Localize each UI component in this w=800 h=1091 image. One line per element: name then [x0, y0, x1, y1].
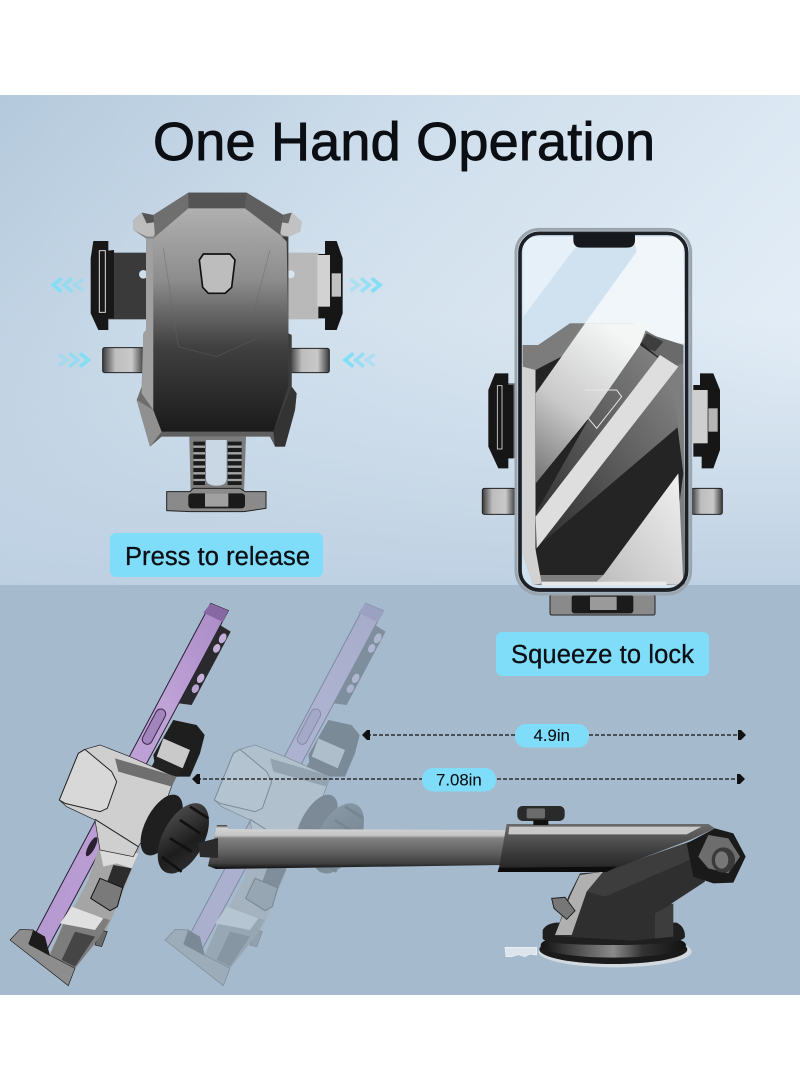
ribbed stem and foot [167, 437, 266, 512]
left tab [482, 488, 516, 514]
label: squeeze to lock [496, 632, 709, 676]
chevrons upper right [350, 278, 380, 292]
right clamp [692, 373, 720, 468]
title: One Hand Operation [153, 112, 655, 172]
reflection lower right [597, 473, 683, 585]
dimension: 4.9in: 4.9in [534, 726, 570, 745]
column [655, 903, 673, 938]
arrows: press direction [53, 278, 380, 367]
holder: side view [10, 603, 231, 986]
rear pivot knob [687, 828, 746, 883]
body shell [133, 193, 302, 447]
lower right tab [290, 348, 329, 373]
foot [550, 595, 655, 615]
sleeve [498, 824, 715, 872]
phone frame [520, 233, 687, 590]
holder shell behind glass [523, 323, 685, 585]
right tab [692, 488, 722, 514]
suction mount [498, 806, 746, 967]
surface lines [163, 248, 270, 357]
dimension: 7.08in: 7.08in [436, 770, 482, 790]
dark stripe shade [536, 345, 678, 548]
pull tab [505, 947, 537, 957]
left rail [523, 367, 542, 585]
screen glass [522, 235, 685, 588]
upper right clamp arm [287, 241, 343, 330]
shell corner highlights [133, 193, 302, 447]
chevrons lower right [345, 353, 375, 367]
panel: upper gradient background [0, 95, 800, 586]
holder: open front view [91, 193, 343, 512]
holder top corners [523, 323, 683, 380]
telescopic arm [208, 825, 510, 869]
lever [552, 897, 575, 919]
panel: lower blue-gray background [0, 585, 800, 995]
label: press to release: Press to release [125, 543, 310, 571]
notch [573, 233, 635, 248]
holder: clamped phone front view [482, 229, 722, 615]
label: squeeze to lock: Squeeze to lock [511, 641, 694, 669]
ghost holder: retracted position [165, 603, 386, 986]
base disc [539, 923, 687, 964]
neck [555, 842, 705, 941]
chevrons upper left [53, 278, 83, 292]
chevrons lower left [59, 353, 88, 367]
neck highlight [555, 872, 603, 935]
sleeve highlight [508, 827, 702, 834]
ball joint stem [198, 838, 218, 858]
top thumb knob [517, 806, 565, 825]
lower left tab [103, 348, 144, 373]
front face [153, 208, 288, 432]
phone outer edge [516, 229, 691, 594]
dimension: 4.9in [362, 724, 746, 748]
bottom white strip [542, 582, 667, 586]
neck shade [587, 842, 693, 897]
reflection band narrow [536, 355, 678, 548]
dimension: 7.08in [192, 768, 745, 792]
reflection band wide [536, 323, 648, 483]
button outline [585, 390, 622, 428]
label: press to release [110, 533, 323, 577]
clear suction cup [538, 936, 692, 967]
sleeve bottom edge [498, 867, 617, 872]
holder face [536, 342, 683, 575]
release button [199, 254, 235, 293]
upper left clamp arm [91, 241, 148, 330]
glass reflections top [523, 237, 685, 343]
left clamp [488, 373, 517, 468]
